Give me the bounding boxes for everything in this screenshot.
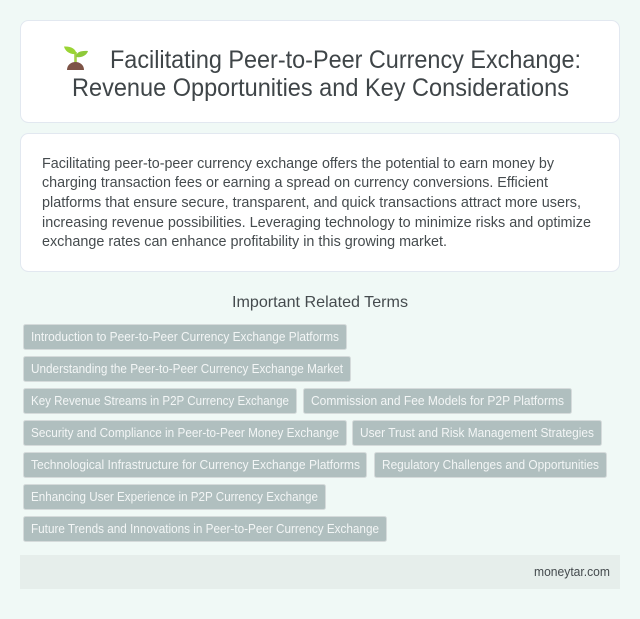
intro text block bbox=[42, 156, 591, 250]
tag bbox=[24, 324, 346, 350]
tag: Understanding the Peer-to-Peer Currency Exchange Market bbox=[31, 362, 343, 376]
tag bbox=[24, 516, 386, 542]
tag bbox=[304, 388, 572, 414]
title: Facilitating Peer-to-Peer Currency Exchange: bbox=[110, 46, 581, 74]
intro text block: charging transaction fees or earning a spread on currency conversions. Efficient bbox=[42, 175, 548, 191]
tag: Key Revenue Streams in P2P Currency Exchange bbox=[31, 394, 289, 408]
intro panel bbox=[20, 134, 620, 272]
tag: Regulatory Challenges and Opportunities bbox=[382, 458, 599, 472]
title: Revenue Opportunities and Key Considerations bbox=[72, 74, 569, 102]
tag bbox=[352, 420, 602, 446]
tag: Commission and Fee Models for P2P Platforms bbox=[311, 394, 564, 408]
tag bbox=[374, 452, 606, 478]
heading: important related terms: Important Related Terms bbox=[232, 294, 408, 311]
tag: Technological Infrastructure for Currency Exchange Platforms bbox=[31, 458, 360, 472]
footer bbox=[20, 555, 620, 589]
icon: seedling bbox=[64, 46, 88, 70]
tag bbox=[24, 356, 350, 382]
related terms tags bbox=[24, 324, 606, 542]
title bbox=[72, 46, 581, 102]
tag: Enhancing User Experience in P2P Currency Exchange bbox=[31, 490, 318, 504]
tag: User Trust and Risk Management Strategies bbox=[360, 426, 594, 440]
tag: Introduction to Peer-to-Peer Currency Exchange Platforms bbox=[31, 330, 339, 344]
intro text block: increasing revenue possibilities. Leveraging technology to minimize risks and optimize bbox=[42, 215, 591, 231]
header panel bbox=[20, 20, 620, 122]
tag: Security and Compliance in Peer-to-Peer Money Exchange bbox=[31, 426, 339, 440]
intro text block: Facilitating peer-to-peer currency exchange offers the potential to earn money by bbox=[42, 156, 555, 172]
tag bbox=[24, 420, 346, 446]
tag bbox=[24, 484, 326, 510]
intro text block: platforms that ensure secure, transparent, and quick transactions attract more users, bbox=[42, 195, 581, 211]
tag bbox=[24, 452, 366, 478]
tag: Future Trends and Innovations in Peer-to-Peer Currency Exchange bbox=[31, 522, 379, 536]
tag bbox=[24, 388, 296, 414]
footer source: moneytar.com bbox=[534, 565, 610, 579]
intro text block: exchange rates can enhance profitability in this growing market. bbox=[42, 234, 447, 250]
